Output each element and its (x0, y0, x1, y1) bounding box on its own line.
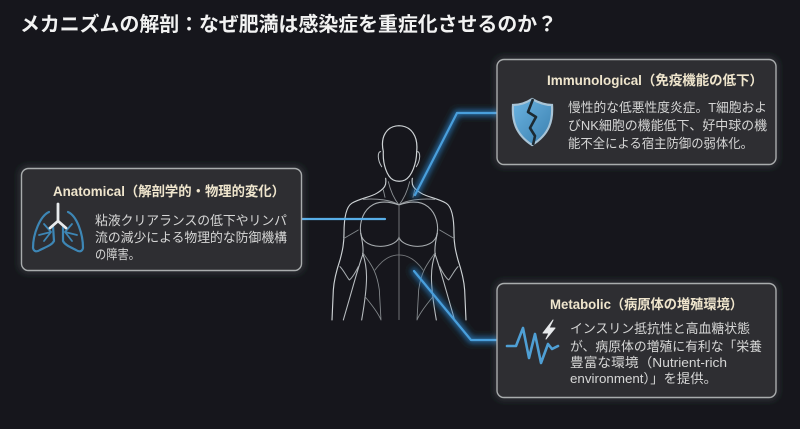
body text (95, 213, 287, 262)
head (382, 126, 417, 181)
body text: environment）」を提供。 (570, 371, 717, 386)
right half of torso (399, 152, 466, 320)
body text: の障害。 (95, 247, 140, 262)
human body outline (332, 126, 466, 320)
body text: インスリン抵抗性と高血糖状態 (570, 321, 750, 336)
body text: 豊富な環境（Nutrient-rich (570, 355, 727, 370)
body text: びNK細胞の機能低下、好中球の機 (568, 118, 767, 133)
body text: 慢性的な低悪性度炎症。T細胞およ (568, 100, 767, 115)
left half of torso (332, 152, 399, 320)
heading: Metabolic（病原体の増殖環境） (550, 296, 743, 312)
centre line (397, 205, 400, 320)
body text (570, 321, 762, 386)
body text: が、病原体の増殖に有利な「栄養 (570, 339, 762, 354)
title: メカニズムの解剖：なぜ肥満は感染症を重症化させるのか？ (20, 12, 557, 36)
icon: pulse with bolt (507, 320, 558, 363)
body text: 流の減少による物理的な防御機構 (95, 230, 287, 245)
icon: lungs (33, 204, 83, 251)
panel: anatomical (21, 168, 302, 271)
panel: metabolic (497, 283, 776, 398)
body text: 能不全による宿主防御の弱体化。 (568, 136, 753, 151)
panel: immunological (497, 59, 776, 165)
connector: immunological (415, 113, 497, 195)
body text (568, 100, 767, 151)
icon: cracked shield (513, 99, 552, 145)
body text: 粘液クリアランスの低下やリンパ (95, 213, 287, 228)
connector: anatomical (302, 216, 385, 222)
heading: Immunological（免疫機能の低下） (547, 72, 763, 88)
heading: Anatomical（解剖学的・物理的変化） (53, 183, 285, 199)
connector: metabolic (414, 271, 497, 340)
